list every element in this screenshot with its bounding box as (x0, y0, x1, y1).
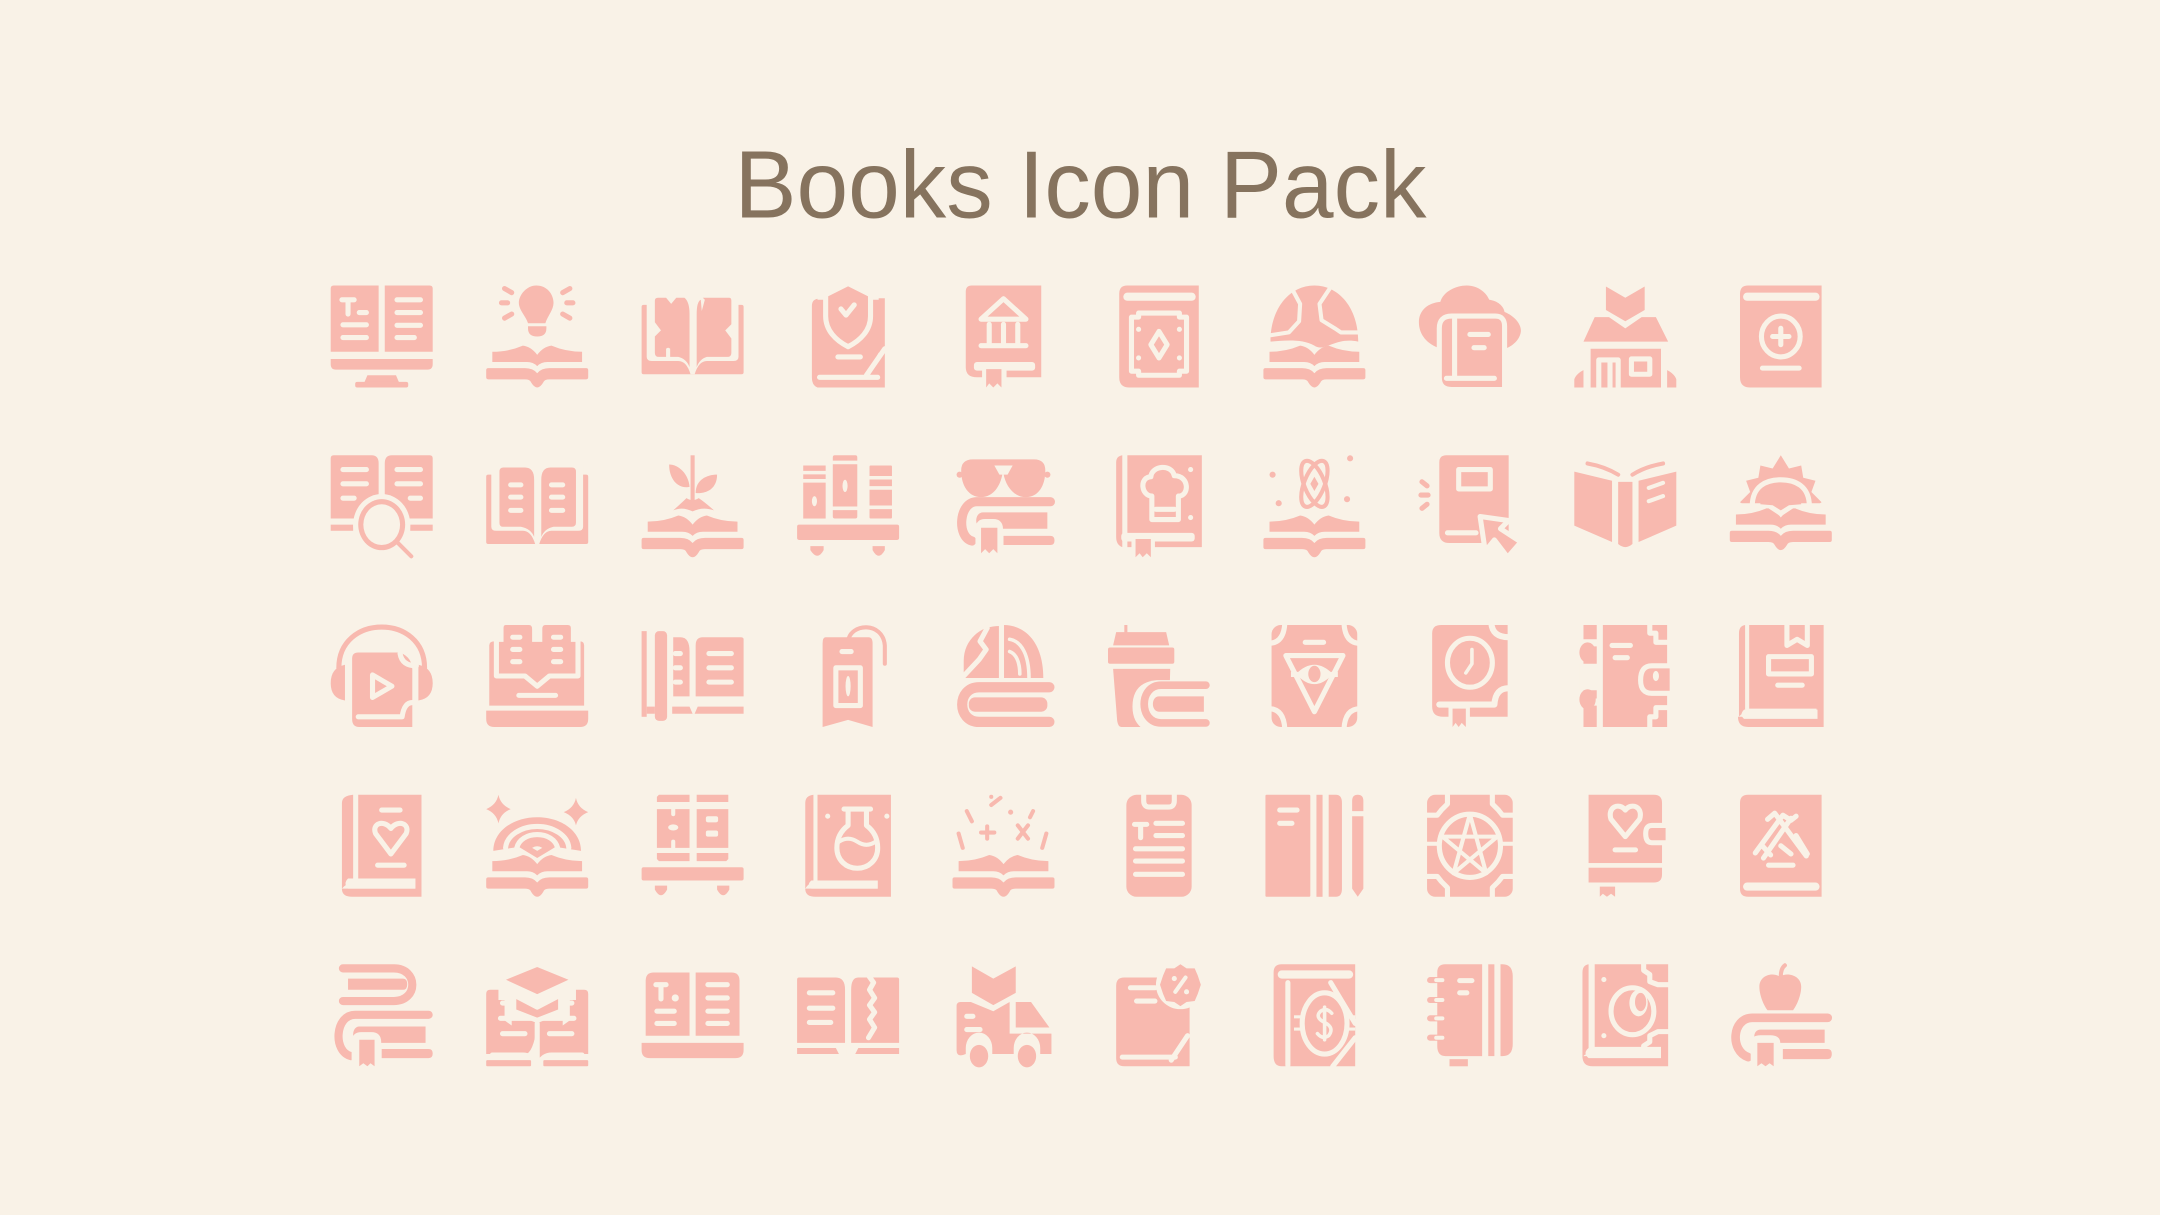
icon: moon book (1582, 962, 1670, 1066)
icon: wallet planner (1579, 624, 1672, 728)
icon: rainbow and sparkles (486, 795, 588, 897)
icon: click book (1421, 455, 1521, 557)
icon: open book upright (1574, 463, 1676, 547)
icon: bookmark (823, 627, 885, 727)
title: Books Icon Pack (734, 132, 1427, 238)
icon: shelf of books (642, 795, 744, 895)
icon: book with magnifier (331, 455, 433, 556)
icon: ribbons book (1740, 795, 1822, 897)
icon: torn page book (797, 976, 899, 1056)
icon: graduation cap book (486, 964, 588, 1066)
icon: discount badge book (1116, 960, 1205, 1066)
icon: flask book (805, 795, 891, 897)
icon: sunrise over book (1730, 455, 1832, 550)
icon: shield book (812, 283, 885, 388)
icon: monitor book (331, 286, 433, 388)
icon: atom over book (1263, 455, 1365, 557)
icon: chart on book (962, 623, 1049, 722)
icon: apple on books (1736, 965, 1832, 1068)
icon: delivery truck with book (957, 966, 1051, 1067)
icon: broken globe and book (1263, 286, 1365, 388)
icon: ornate book (1119, 286, 1199, 388)
icon: book with spine strip (642, 631, 744, 721)
icon: tablet book (642, 972, 744, 1058)
icon: pentagram card (1424, 793, 1516, 899)
icon: glasses on books (957, 459, 1054, 559)
icon: spiral notebook (1427, 964, 1513, 1066)
icon: light bulb over book (486, 286, 588, 388)
icon: coffee cup and book (1108, 625, 1210, 730)
icon: laptop book (486, 625, 588, 727)
icon grid (331, 283, 1832, 1068)
icon: museum book (966, 286, 1041, 390)
icon: open book with pages (486, 466, 588, 544)
icon: heart journal (1589, 795, 1668, 897)
icon: math symbols over book (952, 795, 1054, 897)
icon: book with bookmark (1738, 623, 1824, 727)
icon: plus book (1740, 286, 1822, 388)
icon: clock book (1432, 623, 1509, 729)
icon: cloud book (1419, 286, 1521, 390)
icon: audiobook with headphones (331, 627, 433, 727)
icon: chef hat book (1116, 455, 1202, 559)
icon: books on shelf (797, 455, 899, 556)
icon: mobile book (1126, 793, 1192, 897)
icon: book house (1574, 287, 1676, 388)
icon: torn open book (642, 296, 744, 374)
icon: all-seeing eye card (1268, 623, 1360, 729)
icon: heart book (342, 795, 421, 897)
icon: stacked books (339, 968, 433, 1068)
icon: notebook and pen (1265, 795, 1363, 897)
icon: dollar book (1274, 964, 1355, 1066)
icon: sprout on book (642, 455, 744, 557)
